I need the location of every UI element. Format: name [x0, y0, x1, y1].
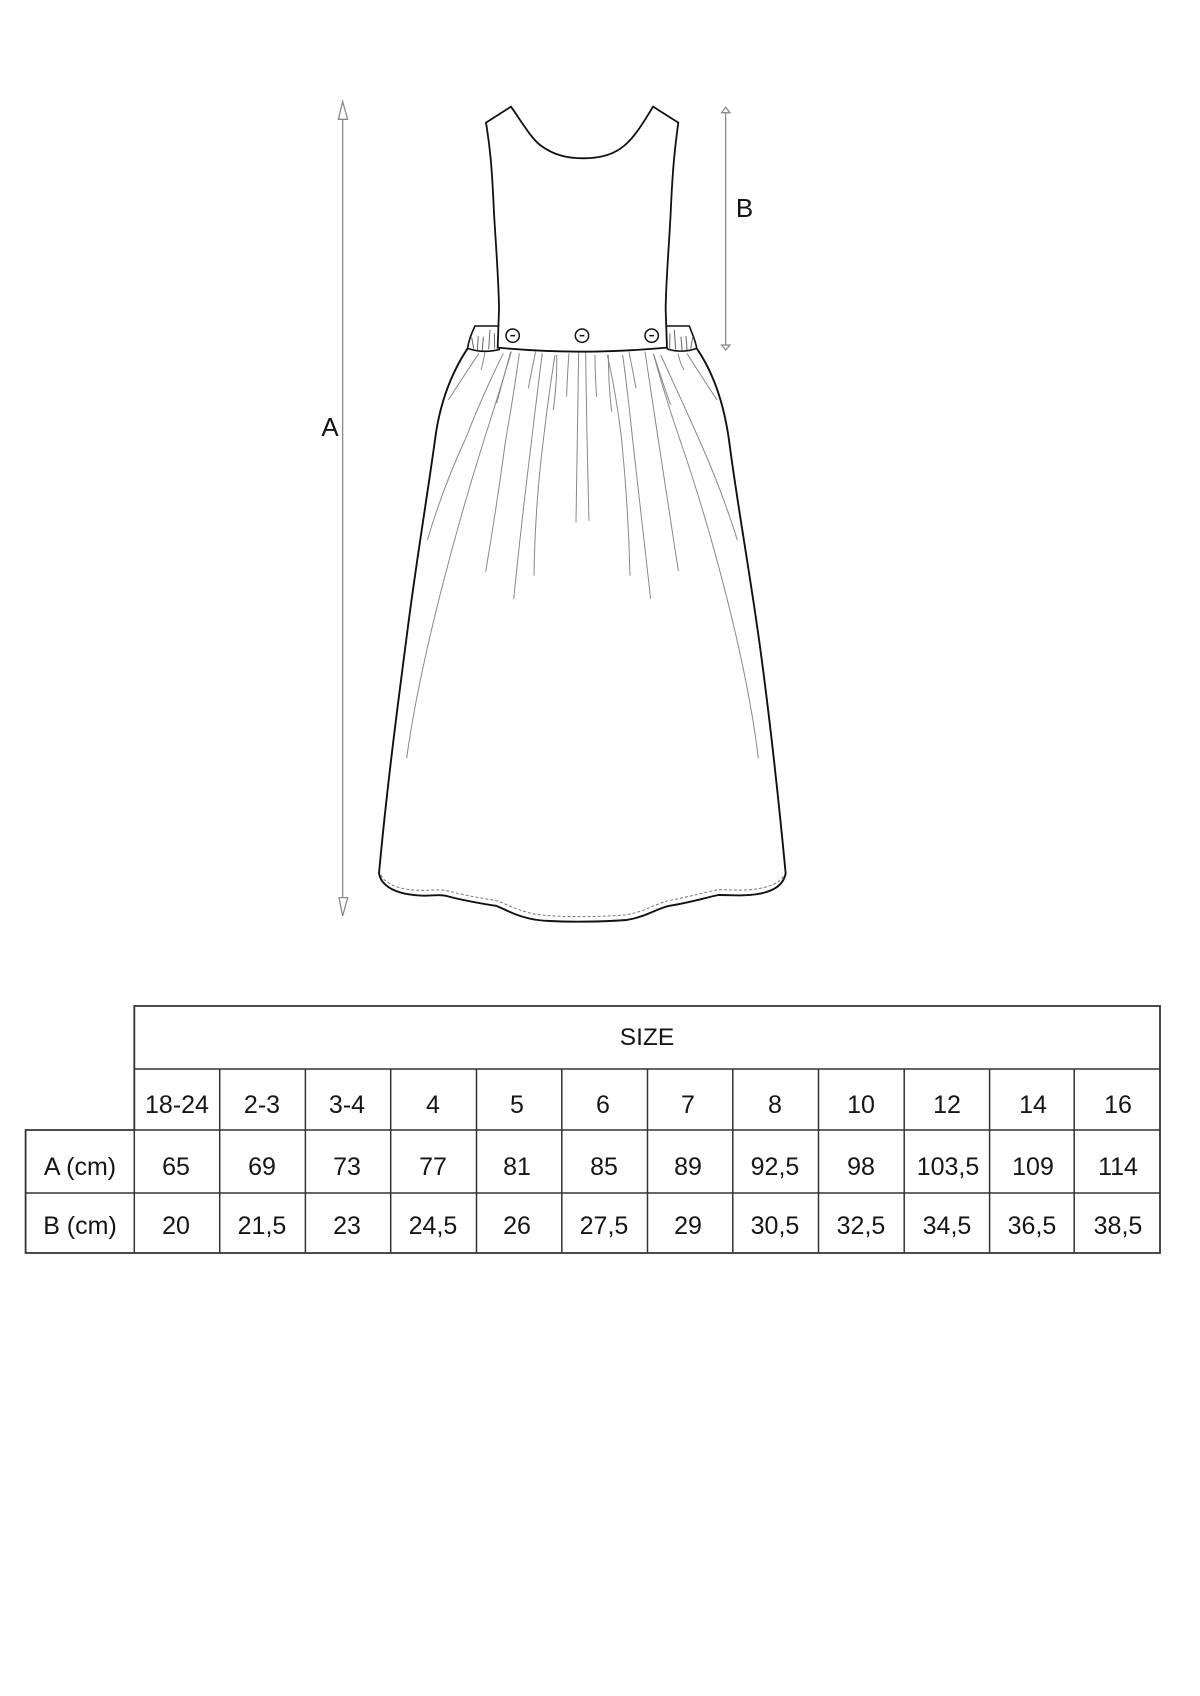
- size row: 4: [426, 1091, 440, 1119]
- row A: 98: [847, 1153, 875, 1181]
- size header: SIZE: [620, 1024, 674, 1051]
- skirt outline: [379, 348, 786, 922]
- size row: 5: [510, 1091, 524, 1119]
- row A: 114: [1098, 1153, 1138, 1181]
- row A: 77: [419, 1153, 447, 1181]
- row A: A (cm): [44, 1153, 116, 1181]
- row A: 85: [590, 1153, 618, 1181]
- row B: 27,5: [580, 1212, 628, 1240]
- button left: [506, 329, 519, 342]
- size row: 7: [681, 1091, 695, 1119]
- row B: 29: [674, 1212, 702, 1240]
- row A: 109: [1012, 1153, 1054, 1181]
- row B: 34,5: [923, 1212, 971, 1240]
- dress technical drawing: [379, 107, 786, 922]
- row A: 103,5: [917, 1153, 979, 1181]
- button right: [645, 329, 658, 342]
- hem stitching: [381, 875, 784, 917]
- row A: [44, 1153, 1138, 1181]
- measurement arrow A: [338, 102, 348, 916]
- skirt folds: [407, 352, 758, 758]
- row A: 92,5: [751, 1153, 799, 1181]
- row B: 26: [503, 1212, 531, 1240]
- row A: 89: [674, 1153, 702, 1181]
- size row: 10: [847, 1091, 875, 1119]
- size row: 6: [596, 1091, 610, 1119]
- row B: 30,5: [751, 1212, 799, 1240]
- row B: 36,5: [1008, 1212, 1056, 1240]
- measurement arrow B: [722, 107, 730, 350]
- row A: 69: [248, 1153, 276, 1181]
- size row: 14: [1019, 1091, 1047, 1119]
- size row: 18-24: [145, 1091, 209, 1119]
- size row: 3-4: [329, 1091, 365, 1119]
- row A: 81: [503, 1153, 531, 1181]
- size row: 8: [768, 1091, 782, 1119]
- row B: 23: [333, 1212, 361, 1240]
- row A: 73: [333, 1153, 361, 1181]
- waistband right: [667, 326, 697, 351]
- size table: [26, 1006, 1160, 1253]
- size row: [145, 1091, 1132, 1119]
- size row: 2-3: [244, 1091, 280, 1119]
- row B: 24,5: [409, 1212, 457, 1240]
- row B: [43, 1212, 1142, 1240]
- label B: B: [736, 193, 753, 223]
- label A: A: [321, 412, 339, 442]
- row A: 65: [162, 1153, 190, 1181]
- row B: 20: [162, 1212, 190, 1240]
- size row: 16: [1104, 1091, 1132, 1119]
- row B: 21,5: [238, 1212, 286, 1240]
- row B: 38,5: [1094, 1212, 1142, 1240]
- bodice: [486, 107, 678, 352]
- row B: B (cm): [43, 1212, 117, 1240]
- waistband left: [468, 326, 500, 351]
- button centre: [575, 329, 589, 342]
- size row: 12: [933, 1091, 961, 1119]
- row B: 32,5: [837, 1212, 885, 1240]
- table grid: [26, 1006, 1160, 1253]
